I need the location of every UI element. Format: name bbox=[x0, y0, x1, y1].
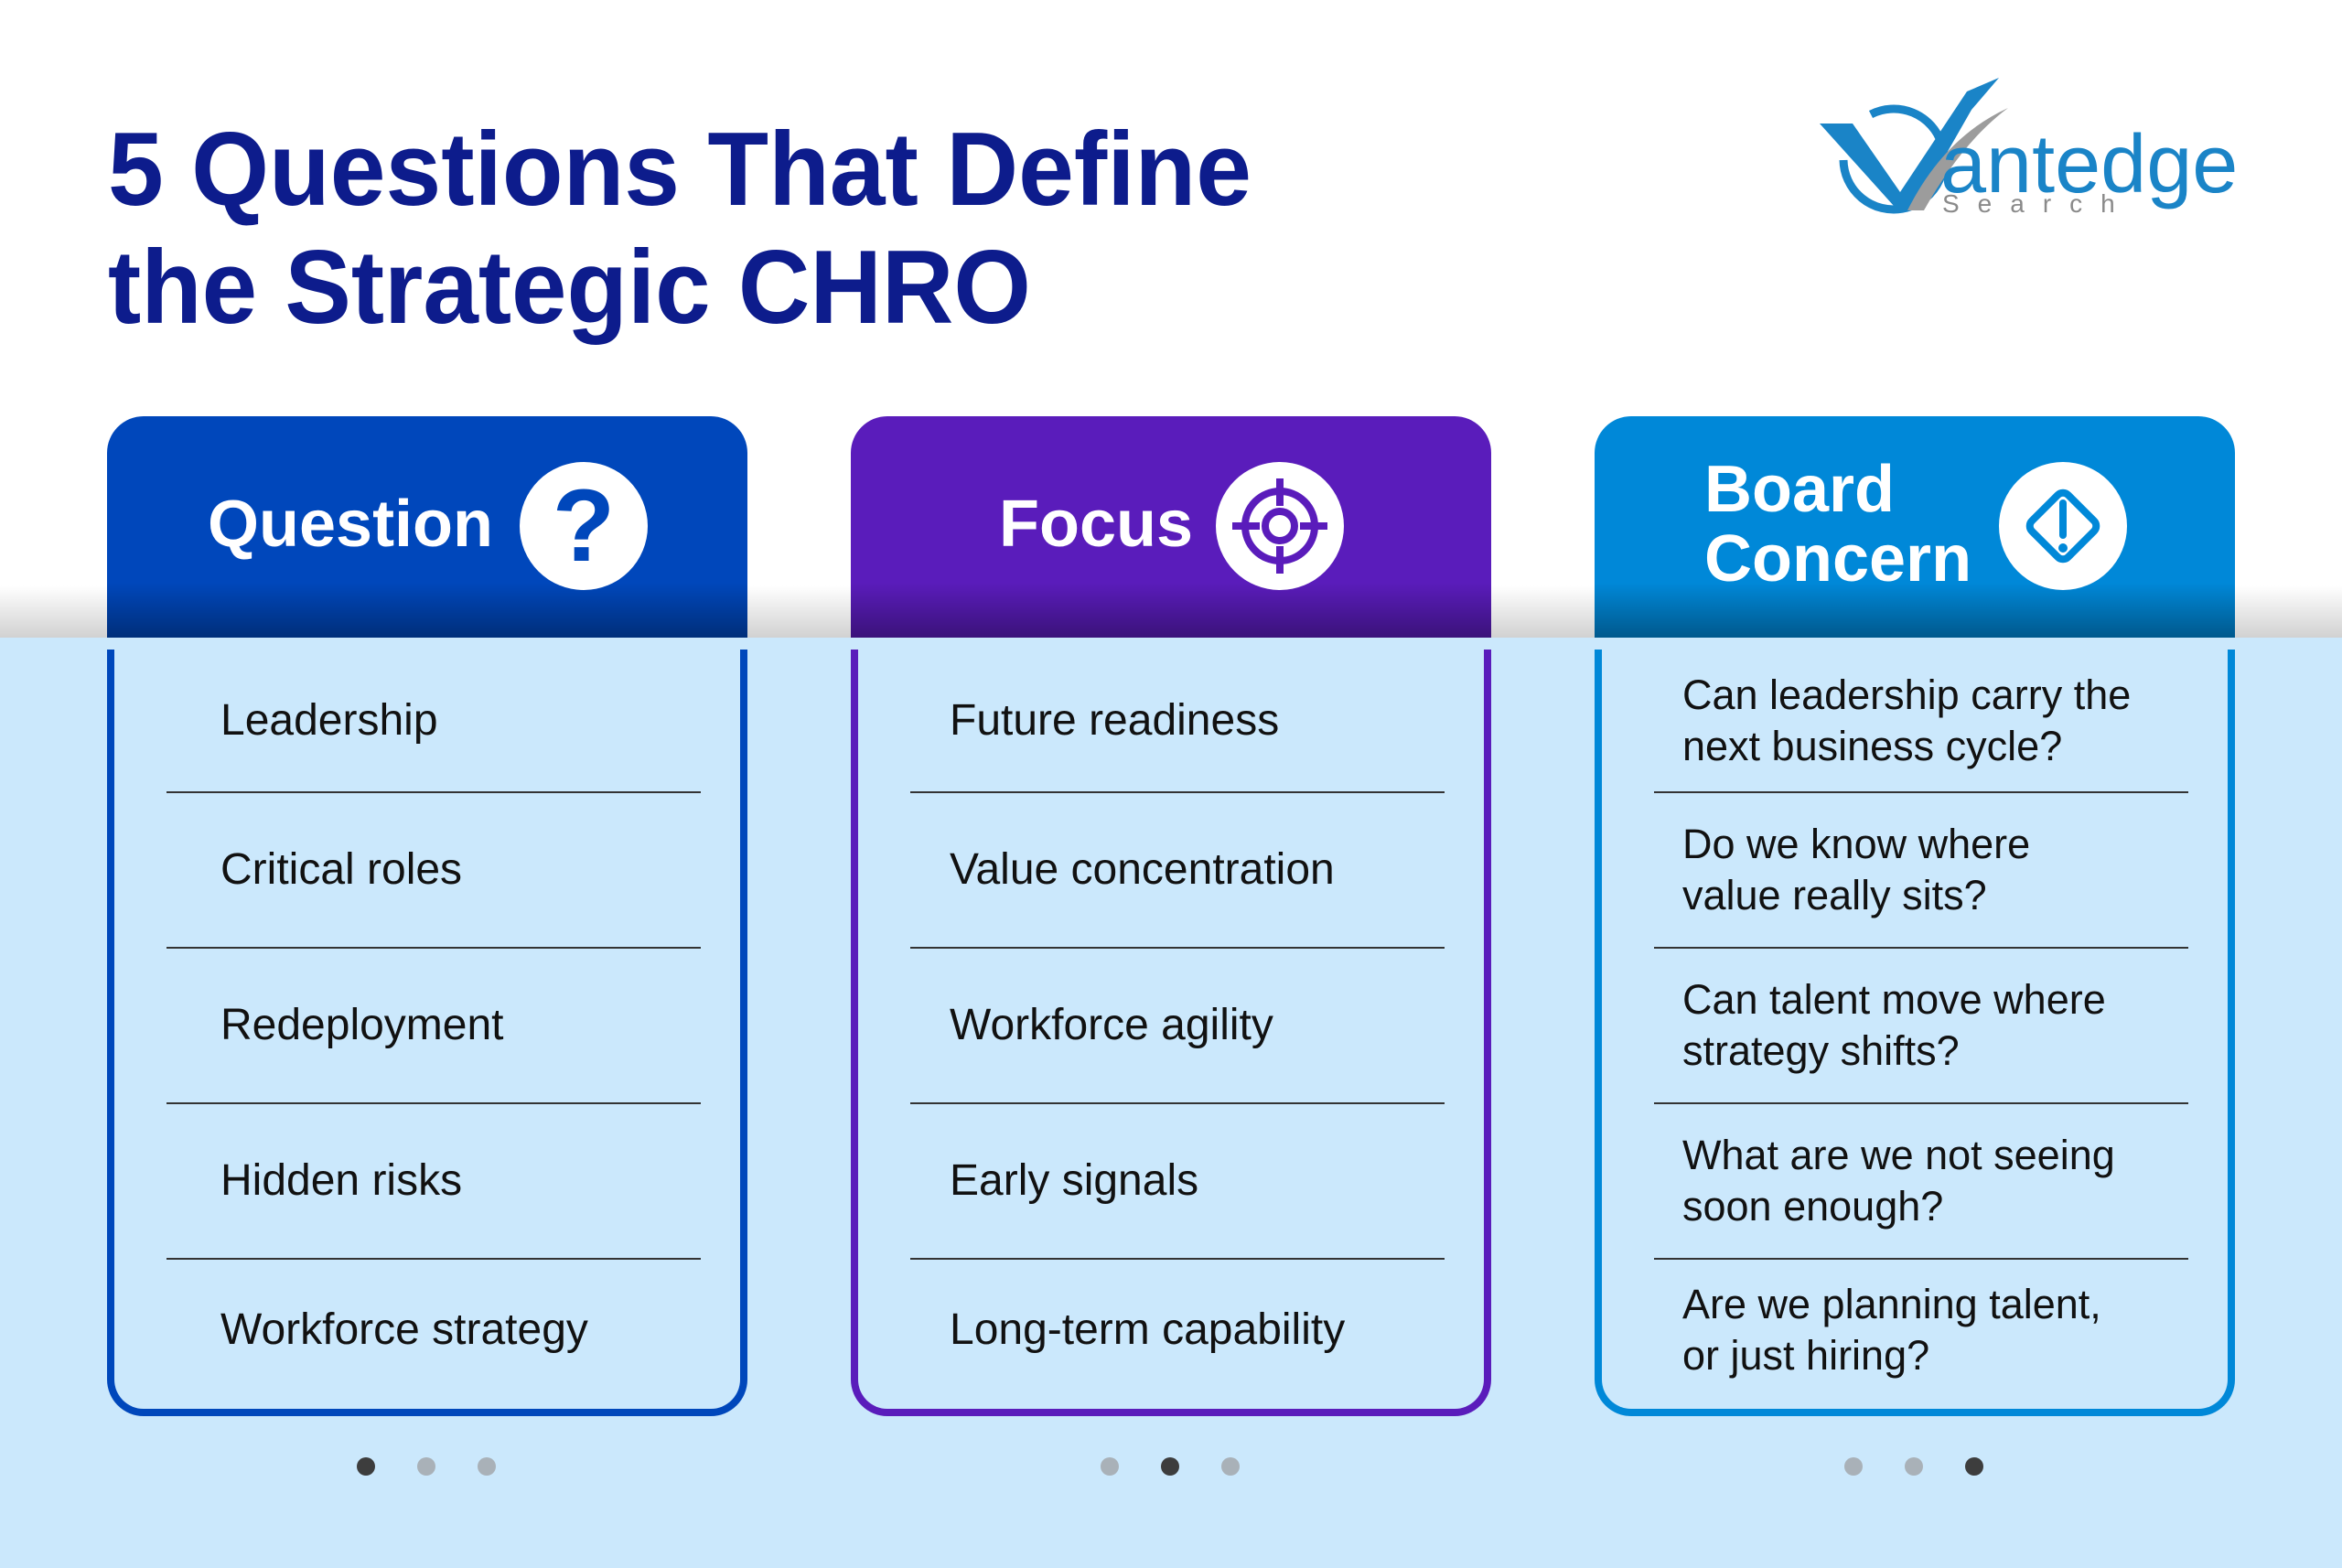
panel: board concern header bbox=[1595, 416, 2235, 638]
heading: Board Concern bbox=[1704, 453, 1971, 596]
item: Are we planning talent, bbox=[1682, 1281, 2101, 1326]
item: Future readiness bbox=[950, 695, 1279, 745]
item: next business cycle? bbox=[1682, 723, 2062, 768]
pagination dots: board concern bbox=[1844, 1457, 1983, 1476]
item: Early signals bbox=[950, 1156, 1198, 1205]
title: the Strategic CHRO bbox=[108, 230, 1031, 346]
panel: focus list bbox=[851, 650, 1491, 1416]
item bbox=[910, 1104, 1445, 1260]
item: Value concentration bbox=[950, 845, 1335, 894]
item: soon enough? bbox=[1682, 1183, 1943, 1230]
panel: question list bbox=[107, 650, 747, 1416]
item: value really sits? bbox=[1682, 872, 1987, 918]
item bbox=[1654, 949, 2188, 1104]
item bbox=[167, 1104, 701, 1260]
logo: Vantedge Search: Search bbox=[1942, 189, 2133, 218]
heading: Question: Question bbox=[208, 488, 493, 561]
item: Redeployment bbox=[220, 1001, 504, 1049]
item: Can talent move where bbox=[1682, 976, 2106, 1023]
logo: Vantedge Search: antedge bbox=[1940, 119, 2238, 210]
item: Critical roles bbox=[220, 845, 462, 894]
item bbox=[167, 793, 701, 949]
icon: question mark: ? bbox=[553, 468, 615, 583]
item: Hidden risks bbox=[220, 1156, 462, 1205]
item bbox=[167, 650, 701, 793]
item: Long-term capability bbox=[950, 1305, 1345, 1354]
title: 5 Questions That Define bbox=[108, 112, 1252, 228]
item: Do we know where bbox=[1682, 821, 2030, 867]
heading: Focus: Focus bbox=[999, 488, 1193, 561]
item: Leadership bbox=[220, 695, 438, 745]
item bbox=[167, 949, 701, 1104]
pagination dots: question bbox=[357, 1457, 496, 1476]
icon: target bbox=[1216, 462, 1344, 590]
item bbox=[1654, 650, 2188, 793]
item: Workforce strategy bbox=[220, 1305, 588, 1354]
pagination dots: focus bbox=[1101, 1457, 1240, 1476]
item bbox=[910, 650, 1445, 793]
item: Workforce agility bbox=[950, 1001, 1273, 1049]
item bbox=[910, 949, 1445, 1104]
item bbox=[1682, 1281, 2101, 1378]
icon: question mark bbox=[520, 462, 648, 590]
item: strategy shifts? bbox=[1682, 1027, 1960, 1074]
panel: board concern list bbox=[1595, 650, 2235, 1416]
item bbox=[910, 793, 1445, 949]
heading: Board Concern: Board bbox=[1704, 453, 1895, 526]
item: or just hiring? bbox=[1682, 1332, 1929, 1378]
item bbox=[1654, 1104, 2188, 1260]
title bbox=[108, 112, 1252, 346]
item bbox=[1654, 793, 2188, 949]
item: What are we not seeing bbox=[1682, 1132, 2115, 1178]
logo: Vantedge Search bbox=[1820, 78, 2238, 218]
panel: focus header bbox=[851, 416, 1491, 638]
icon: warning diamond bbox=[1999, 462, 2127, 590]
panel: question header bbox=[107, 416, 747, 638]
heading: Board Concern: Concern bbox=[1704, 522, 1971, 596]
item: Can leadership carry the bbox=[1682, 671, 2131, 717]
